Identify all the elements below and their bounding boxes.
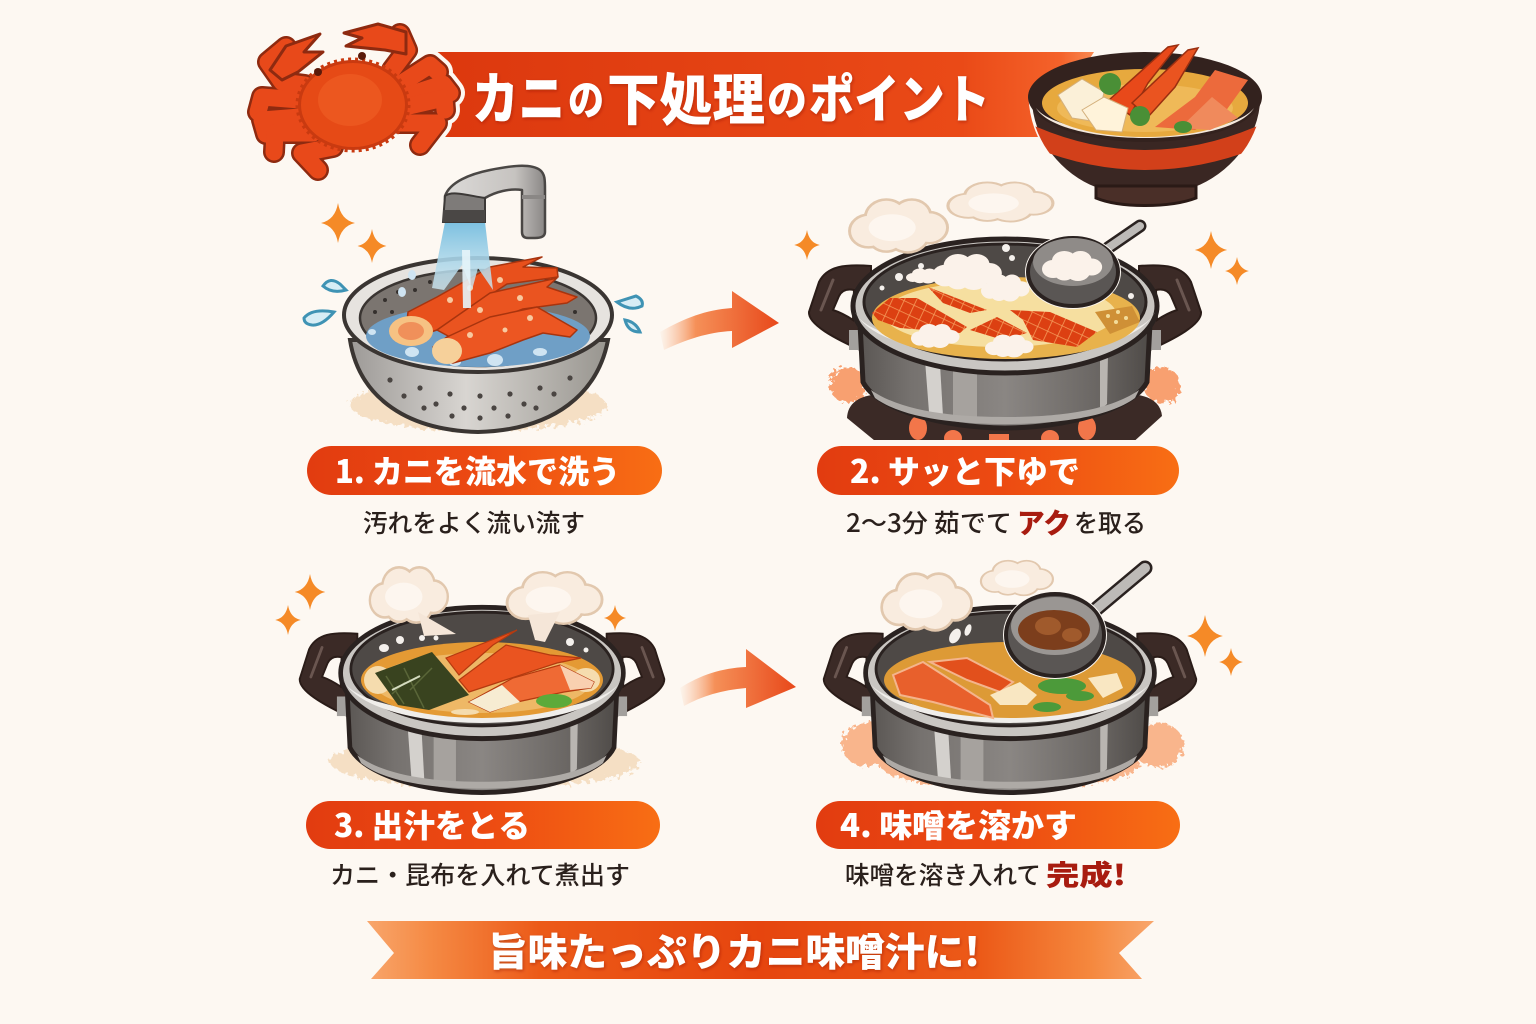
step 3 heading pill: 3. 出汁をとる xyxy=(334,801,530,847)
step 2 illustration: pot on burner xyxy=(794,183,1249,446)
ladle with miso xyxy=(1003,568,1145,679)
bottom ribbon xyxy=(367,921,1154,979)
broth xyxy=(872,277,1140,359)
bubbles xyxy=(947,623,973,645)
broth xyxy=(884,642,1136,718)
step 3 heading pill xyxy=(306,801,660,849)
sparkles xyxy=(275,574,626,635)
step 4 illustration: pot with miso ladle xyxy=(824,562,1243,793)
step 4 caption: 完成! xyxy=(1046,854,1126,894)
icon: miso soup bowl xyxy=(1028,45,1262,206)
ribbon text: 旨味たっぷりカニ味噌汁に! xyxy=(488,922,980,978)
bubbles xyxy=(379,635,588,652)
flesh end xyxy=(469,685,520,712)
shadow patch xyxy=(330,736,640,788)
green onion xyxy=(536,694,572,708)
title text: カニ xyxy=(472,55,565,136)
step 2 heading pill: 2. サッと下ゆで xyxy=(850,447,1080,493)
bubbles xyxy=(880,244,1134,299)
step 2 caption: アク xyxy=(1017,502,1071,542)
shadow patch xyxy=(842,723,1184,789)
step 1 caption: 汚れをよく流い流す xyxy=(363,504,585,540)
sparkles xyxy=(321,203,386,263)
broth xyxy=(361,642,603,718)
steam xyxy=(851,183,1051,251)
colander xyxy=(350,340,608,432)
step 2 caption: を取る xyxy=(1074,504,1146,540)
tofu xyxy=(990,682,1037,705)
sparkles xyxy=(794,230,1249,285)
step 3 caption: カニ・昆布を入れて煮出す xyxy=(330,856,630,892)
green onion xyxy=(1033,678,1094,712)
pot xyxy=(300,607,664,793)
step 4 heading pill xyxy=(816,801,1180,849)
steam xyxy=(883,562,1052,629)
arrow: step 1 to 2 xyxy=(660,291,779,350)
crab legs xyxy=(893,662,993,718)
pot xyxy=(809,239,1201,428)
step 2 caption: 2〜3分 茹でて xyxy=(846,504,1012,540)
steam xyxy=(371,569,601,642)
step 2 caption xyxy=(846,502,1146,542)
title text: の xyxy=(767,67,807,128)
icon: crab xyxy=(258,24,450,170)
flame patches xyxy=(830,367,1180,403)
pot xyxy=(824,607,1196,793)
sparkles xyxy=(1187,615,1243,676)
kelp xyxy=(375,652,469,710)
ladle xyxy=(1025,226,1140,309)
title text xyxy=(472,55,990,137)
step 2 heading pill xyxy=(817,446,1179,495)
title banner xyxy=(432,52,1094,137)
crab pieces xyxy=(872,287,1097,347)
crab legs xyxy=(446,630,517,675)
step 3 illustration: pot with kelp and crab xyxy=(275,569,664,793)
foam xyxy=(906,254,1034,357)
shadow patch xyxy=(350,379,606,431)
title text: の xyxy=(568,67,604,128)
faucet xyxy=(445,166,545,238)
step 4 caption xyxy=(845,854,1126,894)
step 4 caption: 味噌を溶き入れて xyxy=(845,856,1041,892)
arrow: step 3 to 4 xyxy=(680,649,796,708)
burner xyxy=(847,395,1162,440)
crab legs xyxy=(405,257,558,340)
water stream xyxy=(432,222,493,290)
step 1 illustration: colander under faucet xyxy=(304,166,642,432)
water droplets xyxy=(304,280,642,332)
title text: ポイント xyxy=(809,58,990,133)
title text: 下処理 xyxy=(607,56,765,137)
step 4 heading pill: 4. 味噌を溶かす xyxy=(840,801,1077,847)
banner ribbon xyxy=(432,52,1094,137)
step 1 heading pill: 1. カニを流水で洗う xyxy=(335,447,620,493)
